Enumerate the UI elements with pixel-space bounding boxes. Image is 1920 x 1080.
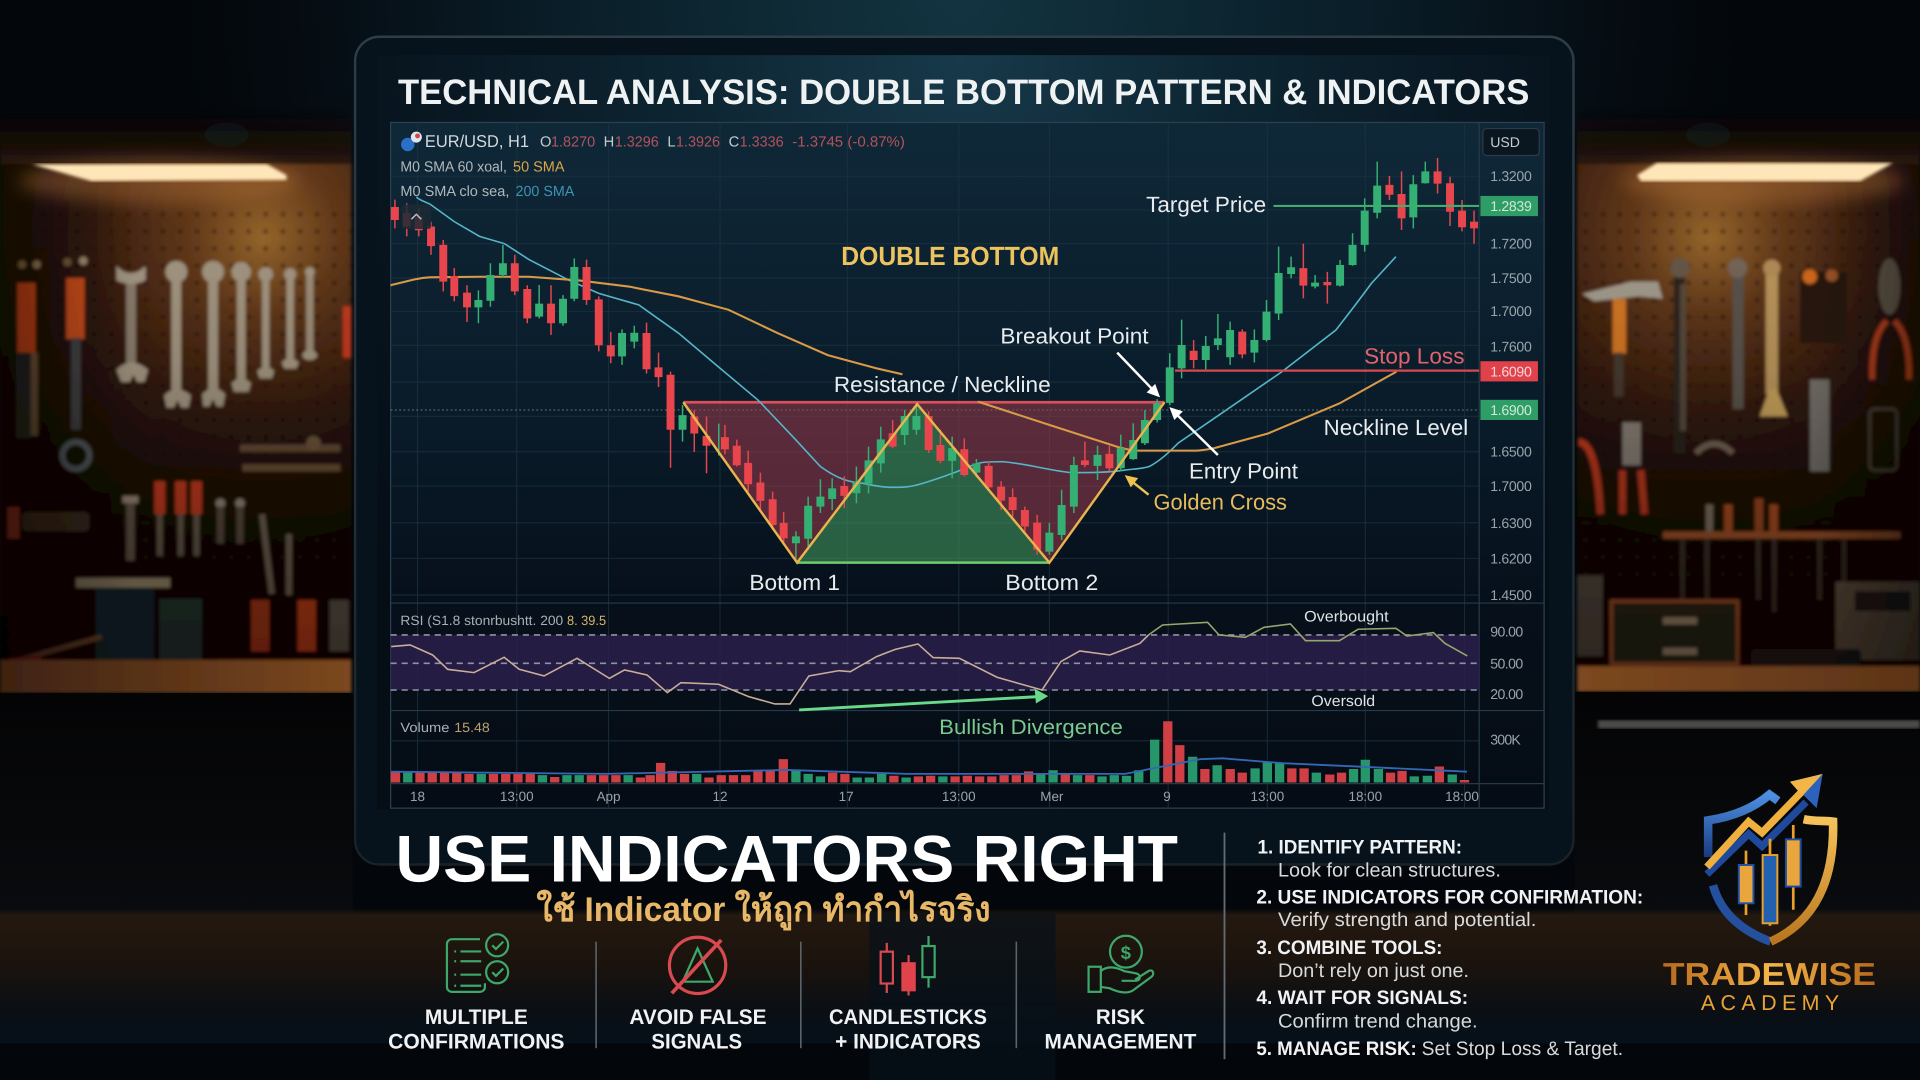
RSI scale: 50.00 <box>1490 658 1523 672</box>
logo: shield <box>1707 774 1833 942</box>
dark zone below left bench <box>0 693 353 913</box>
double bottom pattern shading <box>683 402 1164 563</box>
stop loss line <box>1175 370 1479 372</box>
workbench <box>0 660 351 693</box>
time axis: 13:00 <box>500 790 534 804</box>
RSI scale: 90.00 <box>1490 626 1523 640</box>
RSI line <box>391 635 1149 704</box>
200 SMA legend <box>400 182 574 200</box>
label: candlesticks + indicators <box>829 1004 987 1053</box>
RSI legend: 8. 39.5 <box>567 614 606 629</box>
label: avoid false signals: SIGNALS <box>651 1029 742 1053</box>
ceiling lamp: right <box>1622 122 1904 203</box>
RSI overbought segment <box>1149 622 1467 656</box>
title: TECHNICAL ANALYSIS: DOUBLE BOTTOM PATTERN & INDICATORS <box>398 73 1529 113</box>
collapse button <box>402 204 431 229</box>
arrow: bullish divergence <box>799 689 1048 710</box>
divider <box>1015 942 1017 1048</box>
double bottom W outline <box>683 402 1164 563</box>
tool: rack shelf <box>1663 498 1900 612</box>
price axis: 1.7000 <box>1490 305 1532 320</box>
arrow: breakout <box>1117 353 1160 397</box>
label: multiple confirmations <box>388 1004 564 1053</box>
symbol and OHLC legend: O <box>540 133 551 150</box>
50 SMA legend <box>400 158 564 175</box>
tool: handled spanners <box>16 257 89 469</box>
logo: candles <box>1739 825 1801 926</box>
icon: candlesticks <box>881 936 935 996</box>
dark zone below right bench <box>1575 692 1920 913</box>
step 2: 2. USE INDICATORS FOR CONFIRMATION: <box>1256 888 1643 908</box>
step 4 <box>1256 988 1478 1032</box>
label: risk management: MANAGEMENT <box>1044 1029 1197 1053</box>
price axis: 1.6200 <box>1490 552 1532 567</box>
divider <box>1223 833 1225 1059</box>
step 5: Set Stop Loss & Target. <box>1422 1039 1623 1060</box>
time axis: Mer <box>1040 790 1064 804</box>
price axis: 1.7600 <box>1490 340 1532 355</box>
price axis: 1.7500 <box>1490 272 1532 287</box>
time axis: 18:00 <box>1445 790 1479 804</box>
50 SMA legend: 50 SMA <box>513 158 564 175</box>
symbol and OHLC legend: -1.3745 (-0.87%) <box>792 133 905 150</box>
workshop backdrop: right wall <box>1577 104 1920 692</box>
ceiling lamp: left <box>18 122 300 203</box>
label: target price: Target Price <box>1146 192 1266 217</box>
step 1 <box>1258 838 1501 882</box>
icon: risk management: $ <box>1121 943 1132 964</box>
symbol and OHLC legend: 1.8270 <box>551 133 595 150</box>
workbench <box>1577 666 1920 692</box>
volume legend: Volume <box>400 721 449 736</box>
50 SMA line <box>391 277 1397 451</box>
200 SMA legend: 200 SMA <box>516 182 574 200</box>
price axis: 1.3200 <box>1490 170 1532 185</box>
panel: price chart <box>391 122 1544 808</box>
candlesticks: bullish <box>478 162 1425 560</box>
monitor screen panel <box>377 55 1549 809</box>
time axis <box>410 790 1479 804</box>
time axis: 18 <box>410 790 425 804</box>
price axis: 1.7000 <box>1490 480 1532 495</box>
label: neckline level: Neckline Level <box>1324 415 1468 440</box>
symbol icon <box>401 132 422 151</box>
time axis: 18:00 <box>1348 790 1382 804</box>
label: avoid false signals: AVOID FALSE <box>629 1004 767 1029</box>
label: bullish divergence: Bullish Divergence <box>939 716 1123 739</box>
step 3: 3. COMBINE TOOLS: <box>1256 938 1442 959</box>
symbol and OHLC legend: H <box>604 133 614 150</box>
time axis: 17 <box>839 790 854 804</box>
monitor frame <box>355 37 1573 864</box>
label: risk management: RISK <box>1096 1004 1146 1029</box>
Thai subheading: ใช้ Indicator ให้ถูก ทำกำไรจริง <box>536 889 991 931</box>
volume scale: 300K <box>1490 733 1521 748</box>
step 3: Don’t rely on just one. <box>1278 961 1469 982</box>
panel: RSI <box>391 608 1523 710</box>
symbol and OHLC legend: EUR/USD, H1 <box>425 131 529 151</box>
tool: horizontal spanners, hammer and screwdrivers <box>7 436 349 651</box>
icon: checklist <box>447 934 508 992</box>
logo: rising arrow <box>1707 774 1823 874</box>
step 4: Confirm trend change. <box>1278 1011 1478 1032</box>
logo wordmark: TRADEWISE <box>1663 956 1876 992</box>
volume bars: green <box>408 740 1452 782</box>
step 1: Look for clean structures. <box>1278 861 1501 882</box>
step 5 <box>1256 1039 1623 1060</box>
step 2: Verify strength and potential. <box>1278 910 1536 931</box>
volume legend: 15.48 <box>454 721 490 736</box>
label: resistance neckline: Resistance / Neckline <box>834 372 1051 397</box>
heading: double bottom: DOUBLE BOTTOM <box>841 242 1059 271</box>
icon: risk management <box>1089 936 1153 992</box>
label: entry point: Entry Point <box>1189 459 1298 483</box>
arrow: golden cross <box>1125 475 1149 495</box>
time axis: 9 <box>1163 790 1171 804</box>
price axis: 1.7200 <box>1490 238 1532 252</box>
divider <box>800 942 802 1048</box>
price axis: USD <box>1490 136 1520 151</box>
RSI legend: RSI (S1.8 stonrbushtt. 200 <box>400 614 563 629</box>
label: overbought: Overbought <box>1304 608 1389 625</box>
price axis: 1.6500 <box>1490 446 1532 460</box>
divider <box>595 942 597 1048</box>
time axis: 13:00 <box>1250 790 1284 804</box>
symbol and OHLC legend: 1.3296 <box>615 133 659 150</box>
symbol and OHLC legend: L <box>667 133 676 150</box>
RSI scale: 20.00 <box>1490 688 1523 703</box>
volume bars: red <box>396 721 1464 782</box>
label: breakout point: Breakout Point <box>1000 324 1149 348</box>
step 2 <box>1256 888 1643 931</box>
candlesticks: bearish <box>395 158 1474 555</box>
foreground table band <box>0 909 1920 1080</box>
label: risk management <box>1044 1004 1197 1053</box>
logo: shield halves <box>1708 795 1833 942</box>
step 1: 1. IDENTIFY PATTERN: <box>1258 838 1462 858</box>
50 SMA legend: M0 SMA 60 xoal, <box>400 158 507 175</box>
symbol and OHLC legend: 1.3336 <box>740 133 784 150</box>
symbol and OHLC legend <box>425 131 905 151</box>
label: candlesticks + indicators: CANDLESTICKS <box>829 1004 987 1029</box>
tool: row of wrenches <box>116 261 351 408</box>
label: avoid false signals <box>629 1004 767 1053</box>
icon: avoid false signals <box>669 937 726 994</box>
price axis <box>1480 129 1539 604</box>
volume legend <box>400 721 490 736</box>
tool: drawer box and stack <box>1577 576 1920 666</box>
label: candlesticks + indicators: + INDICATORS <box>835 1029 981 1053</box>
steps list <box>1256 838 1643 1060</box>
main headline: USE INDICATORS RIGHT <box>396 823 1178 896</box>
label: bottom 2: Bottom 2 <box>1005 570 1098 595</box>
target price line <box>1273 205 1479 207</box>
step 5: 5. MANAGE RISK: <box>1256 1039 1417 1060</box>
label: multiple confirmations: MULTIPLE <box>425 1004 528 1029</box>
workshop backdrop: left wall <box>0 104 351 693</box>
tool: pliers <box>1578 258 1909 514</box>
time axis: App <box>597 790 621 804</box>
label: golden cross: Golden Cross <box>1153 490 1287 514</box>
label: stop loss: Stop Loss <box>1364 344 1464 368</box>
symbol and OHLC legend: C <box>729 133 740 150</box>
panel: volume <box>391 716 1521 804</box>
price axis: 1.6900 <box>1490 404 1532 419</box>
label: multiple confirmations: CONFIRMATIONS <box>388 1029 564 1053</box>
time axis: 13:00 <box>942 790 976 804</box>
200 SMA legend: M0 SMA clo sea, <box>400 182 509 200</box>
RSI scale <box>1490 626 1523 703</box>
price axis: 1.6090 <box>1490 366 1532 380</box>
logo subline: ACADEMY <box>1701 991 1840 1015</box>
symbol and OHLC legend: 1.3926 <box>676 133 720 150</box>
price axis: 1.6300 <box>1490 517 1532 531</box>
price axis: 1.4500 <box>1490 589 1532 604</box>
tool: hammer and wrenches <box>1582 258 1847 453</box>
step 4: 4. WAIT FOR SIGNALS: <box>1256 988 1468 1009</box>
volume moving average <box>391 758 1467 774</box>
200 SMA line <box>416 197 1396 487</box>
tool: bench vise <box>10 578 204 676</box>
label: oversold: Oversold <box>1311 692 1375 710</box>
arrow: entry <box>1169 407 1218 455</box>
time axis: 12 <box>712 790 728 804</box>
step 3 <box>1256 938 1469 982</box>
label: bottom 1: Bottom 1 <box>749 570 840 595</box>
price axis: 1.2839 <box>1490 200 1532 215</box>
